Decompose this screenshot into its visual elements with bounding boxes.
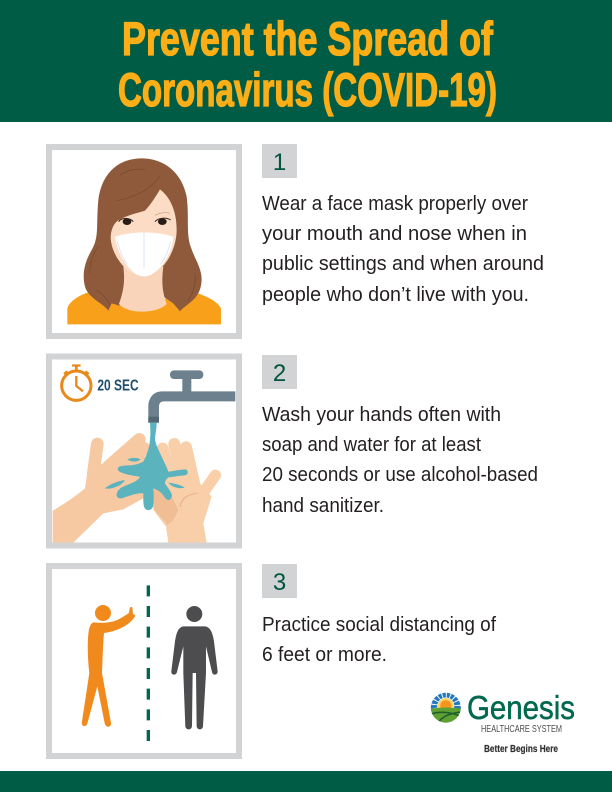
step 1 text: Wear a face mask properly over [262, 193, 528, 215]
footer band [0, 771, 612, 792]
logo subtitle: HEALTHCARE SYSTEM [481, 723, 562, 735]
step 2 text [262, 404, 538, 517]
step 1 text: people who don’t live with you. [262, 284, 529, 306]
panel: hand washing illustration [49, 356, 239, 546]
number badge 3: 3 [273, 569, 286, 596]
step 1 text: your mouth and nose when in [262, 223, 527, 245]
step 1 [262, 144, 544, 306]
step 2 text: soap and water for at least [262, 434, 481, 456]
logo wordmark: Genesis [467, 689, 575, 726]
icon: sunrise over fields [430, 692, 462, 724]
neck [119, 267, 167, 312]
timer label: 20 SEC [97, 377, 139, 394]
logo tagline: Better Begins Here [484, 744, 558, 755]
step 3 text: 6 feet or more. [262, 644, 387, 666]
face [111, 189, 177, 277]
number badge 2 [262, 355, 297, 389]
mask [115, 232, 173, 276]
number badge 2: 2 [273, 360, 286, 387]
step 3 text [262, 614, 496, 666]
grey figure [171, 606, 218, 729]
right hand [153, 444, 215, 543]
number badge 1: 1 [273, 149, 286, 176]
icon: stopwatch [62, 364, 91, 400]
header band [0, 0, 612, 122]
step 2 text: Wash your hands often with [262, 404, 501, 426]
eyes [119, 213, 171, 225]
shirt [67, 291, 221, 324]
step 2 [262, 355, 538, 517]
step 2 text: hand sanitizer. [262, 495, 384, 517]
hair back [84, 158, 202, 311]
title [118, 12, 497, 116]
faucet [148, 370, 235, 423]
panel: face mask illustration [49, 147, 239, 336]
water [105, 423, 188, 510]
number badge 1 [262, 144, 297, 178]
orange figure [82, 605, 135, 727]
dashed divider [143, 585, 153, 741]
step 3 [262, 564, 496, 666]
step 2 text: 20 seconds or use alcohol-based [262, 464, 538, 486]
left hand [53, 439, 147, 543]
step 3 text: Practice social distancing of [262, 614, 496, 636]
hair creases [90, 169, 195, 305]
number badge 3 [262, 564, 297, 598]
step 1 text: public settings and when around [262, 253, 544, 275]
Genesis logo [430, 689, 575, 755]
step 1 text [262, 193, 544, 306]
panel: social distancing illustration [49, 566, 239, 756]
title: Prevent the Spread of [122, 12, 493, 65]
